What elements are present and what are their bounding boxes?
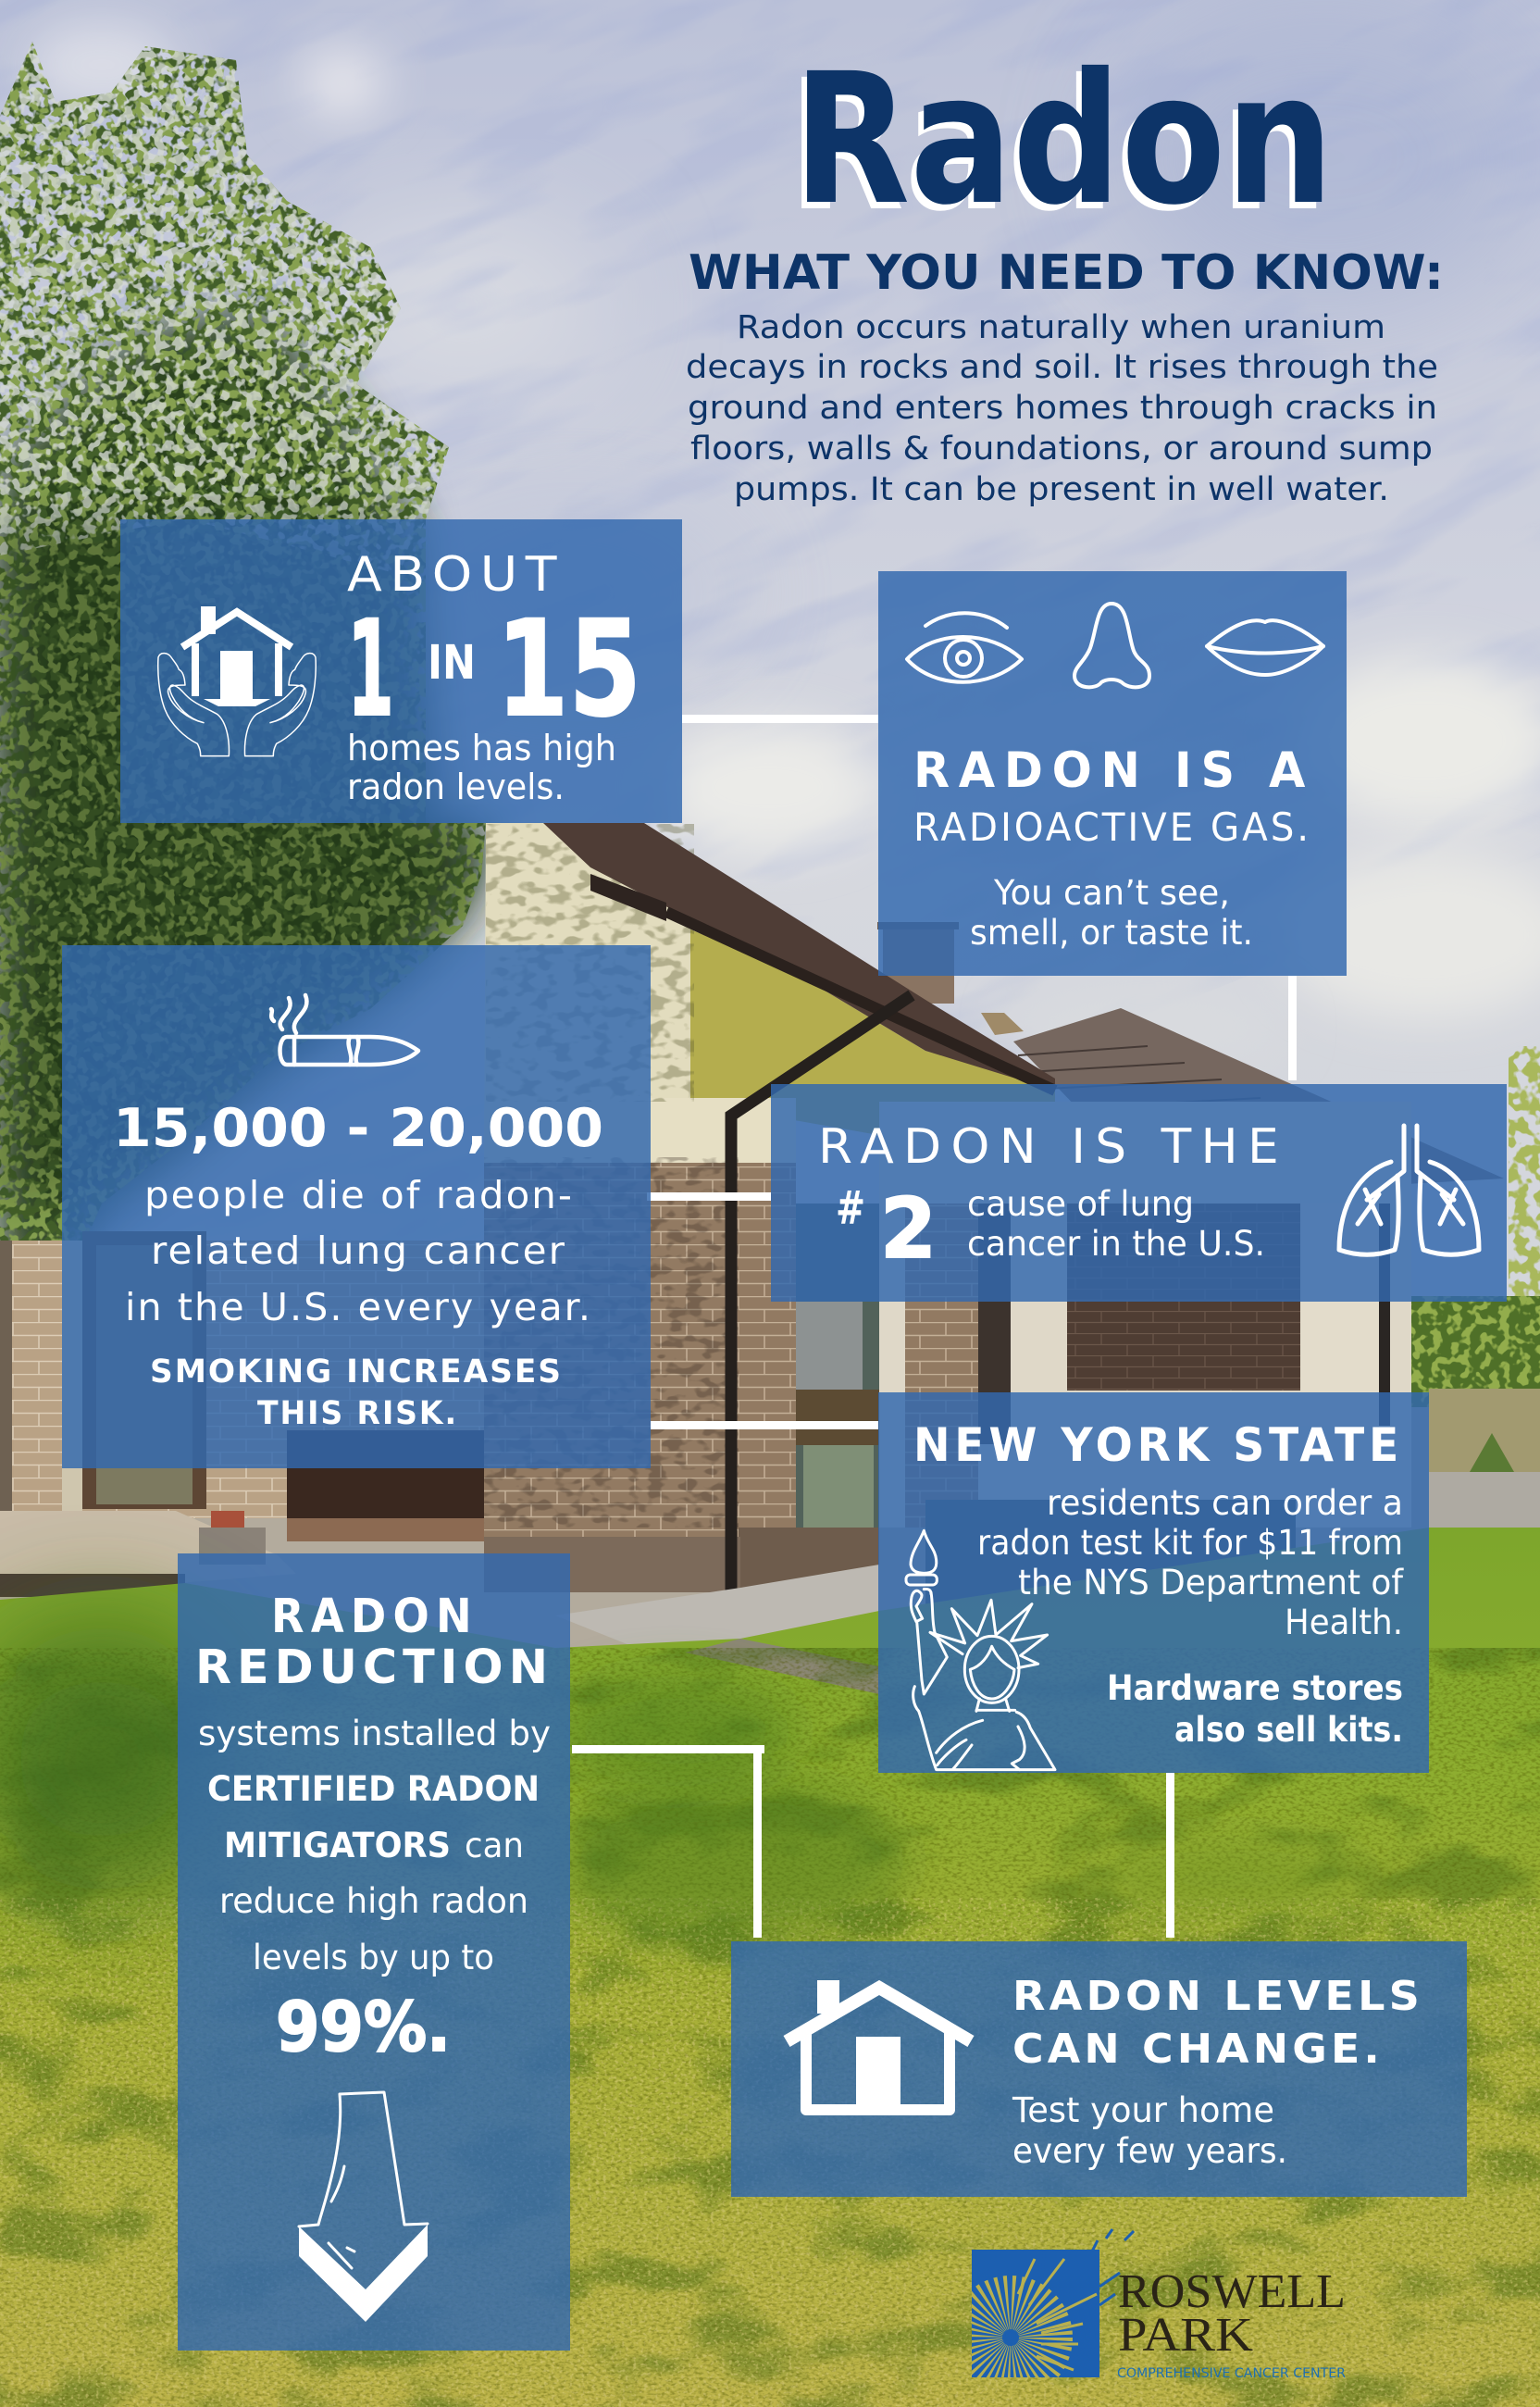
- icon: nose: [1074, 604, 1149, 687]
- text: systems installed by certified radon mitigators: MITIGATORS: [224, 1826, 451, 1865]
- text: test your home every few years: every few years.: [1012, 2131, 1287, 2171]
- house: rear roof: [1013, 1008, 1504, 1194]
- text: cause of lung cancer in the u.s.: cancer in the U.S.: [967, 1224, 1265, 1264]
- logo mark: starburst: [972, 2229, 1134, 2377]
- text: test your home every few years: Test your home: [1012, 2090, 1274, 2130]
- icon: down arrow: [299, 2092, 428, 2322]
- text: people die of radon-related lung cancer: in the U.S. every year.: [125, 1285, 592, 1329]
- panel: new york state: [878, 1392, 1429, 1773]
- label: about: ABOUT: [347, 547, 565, 603]
- text: people die of radon-related lung cancer: people die of radon-: [144, 1173, 574, 1217]
- intro text block: ground and enters homes through cracks in: [688, 390, 1437, 427]
- panel: radon is a radioactive gas: [878, 571, 1347, 976]
- logo wordmark: [1117, 2265, 1346, 2381]
- heading: radon reduction: [195, 1590, 553, 1695]
- chimney: [883, 922, 954, 1004]
- statistic: 1 in 15: [347, 592, 641, 746]
- text: people die of radon-related lung cancer: related lung cancer: [151, 1228, 566, 1273]
- panel: about 1 in 15 homes: [120, 519, 682, 823]
- connector lines between panels: [572, 715, 1297, 1938]
- text: smoking increases this risk: SMOKING INCREASES: [150, 1353, 563, 1391]
- text: people die of radon-related lung cancer: [125, 1173, 592, 1329]
- icon: eye: [907, 613, 1022, 682]
- logo wordmark: COMPREHENSIVE CANCER CENTER: [1117, 2366, 1346, 2381]
- text: systems installed by certified radon mitigators: [198, 1714, 551, 1977]
- patio and lawn ground: [0, 1511, 296, 1597]
- statistic: #2: [836, 1180, 937, 1277]
- heading: radon is a radioactive gas: [913, 742, 1314, 850]
- text: you can't see, smell or taste it: smell, or taste it.: [970, 913, 1253, 953]
- text: residents can order a kit: residents can order a: [1047, 1483, 1403, 1523]
- icon: cigar with smoke: [271, 995, 418, 1065]
- house: walls: [484, 1163, 739, 1589]
- panel: radon levels can change: [731, 1941, 1467, 2197]
- downpipe: [731, 995, 912, 1611]
- panel: radon reduction: [178, 1553, 570, 2351]
- text: systems installed by certified radon mitigators: reduce high radon: [219, 1881, 528, 1921]
- text: residents can order a kit: Health.: [1285, 1603, 1403, 1642]
- heading: radon is a radioactive gas: RADON IS A: [913, 742, 1314, 799]
- intro text block: pumps. It can be present in well water.: [734, 471, 1389, 508]
- statistic: 1 in 15: IN: [428, 636, 476, 691]
- title: Radon: [788, 41, 1328, 251]
- icon: statue of liberty: [906, 1530, 1055, 1770]
- intro text block: decays in rocks and soil. It rises through the: [686, 349, 1438, 386]
- icon: lips: [1207, 620, 1323, 675]
- lawn shadows: [0, 1620, 1370, 1944]
- heading: radon levels can change: CAN CHANGE.: [1012, 2026, 1384, 2073]
- logo: roswell park comprehensive cancer center: [972, 2229, 1346, 2381]
- tree foliage: [0, 42, 486, 1278]
- statistic: 15,000 - 20,000: 15,000 - 20,000: [113, 1098, 603, 1159]
- statistic: 1 in 15: 1: [347, 592, 394, 746]
- text: homes has high radon levels: radon levels.: [347, 767, 565, 807]
- panel: 15,000 - 20,000 deaths: [62, 945, 651, 1468]
- panel: radon is the #2 cause of lung cancer: [771, 1084, 1507, 1302]
- distant trees: [1509, 1046, 1540, 1305]
- text: test your home every few years: [1012, 2090, 1287, 2171]
- icon: lungs: [1339, 1126, 1479, 1254]
- text: hardware stores also sell kits: also sell kits.: [1174, 1710, 1403, 1750]
- text: you can't see, smell or taste it: You can’t see,: [993, 873, 1230, 913]
- text: homes has high radon levels: homes has high: [347, 728, 616, 768]
- text: systems installed by certified radon mitigators: can: [465, 1826, 524, 1865]
- heading: radon is a radioactive gas: RADIOACTIVE GAS.: [913, 804, 1311, 850]
- heading: radon levels can change: [1012, 1973, 1423, 2073]
- heading: radon levels can change: RADON LEVELS: [1012, 1973, 1423, 2020]
- heading: radon is the: RADON IS THE: [818, 1119, 1288, 1175]
- heading: WHAT YOU NEED TO KNOW:: [689, 245, 1444, 301]
- intro text block: floors, walls & foundations, or around sump: [690, 430, 1433, 468]
- heading: new york state: NEW YORK STATE: [913, 1418, 1403, 1472]
- text: systems installed by certified radon mitigators: levels by up to: [253, 1938, 494, 1977]
- text: cause of lung cancer in the u.s.: [967, 1184, 1265, 1264]
- intro text block: [686, 309, 1438, 508]
- text: cause of lung cancer in the u.s.: cause of lung: [967, 1184, 1194, 1224]
- house: cream gable wall: [484, 823, 740, 1166]
- text: residents can order a kit: the NYS Department of: [1018, 1563, 1404, 1603]
- text: residents can order a kit: [977, 1483, 1404, 1642]
- text: you can't see, smell or taste it: [970, 873, 1253, 953]
- logo wordmark: ROSWELL: [1118, 2265, 1346, 2318]
- statistic: #2: #: [836, 1181, 865, 1235]
- text: smoking increases this risk: THIS RISK.: [257, 1395, 458, 1432]
- house: main roof: [543, 823, 1055, 1091]
- text: residents can order a kit: radon test kit for $11 from: [977, 1523, 1403, 1563]
- statistic: 99%: 99%.: [276, 1988, 451, 2067]
- text: hardware stores also sell kits: [1107, 1668, 1403, 1750]
- title: Radon: [793, 34, 1334, 244]
- logo wordmark: PARK: [1118, 2309, 1253, 2362]
- text: smoking increases this risk: [150, 1353, 563, 1432]
- heading: radon reduction: RADON: [271, 1590, 478, 1644]
- rear dormer cap: [981, 1013, 1024, 1035]
- icon: house outline: [787, 1980, 971, 2110]
- heading: radon reduction: REDUCTION: [195, 1640, 553, 1695]
- text: hardware stores also sell kits: Hardware stores: [1107, 1668, 1403, 1708]
- text: systems installed by certified radon mitigators: CERTIFIED RADON: [207, 1769, 540, 1809]
- text: systems installed by certified radon mitigators: systems installed by: [198, 1714, 551, 1753]
- icon: house in hands: [158, 606, 316, 756]
- intro text block: Radon occurs naturally when uranium: [737, 309, 1385, 346]
- text: homes has high radon levels: [347, 728, 616, 807]
- sky: [0, 0, 1540, 1389]
- statistic: 1 in 15: 15: [496, 592, 641, 746]
- statistic: #2: 2: [880, 1180, 937, 1277]
